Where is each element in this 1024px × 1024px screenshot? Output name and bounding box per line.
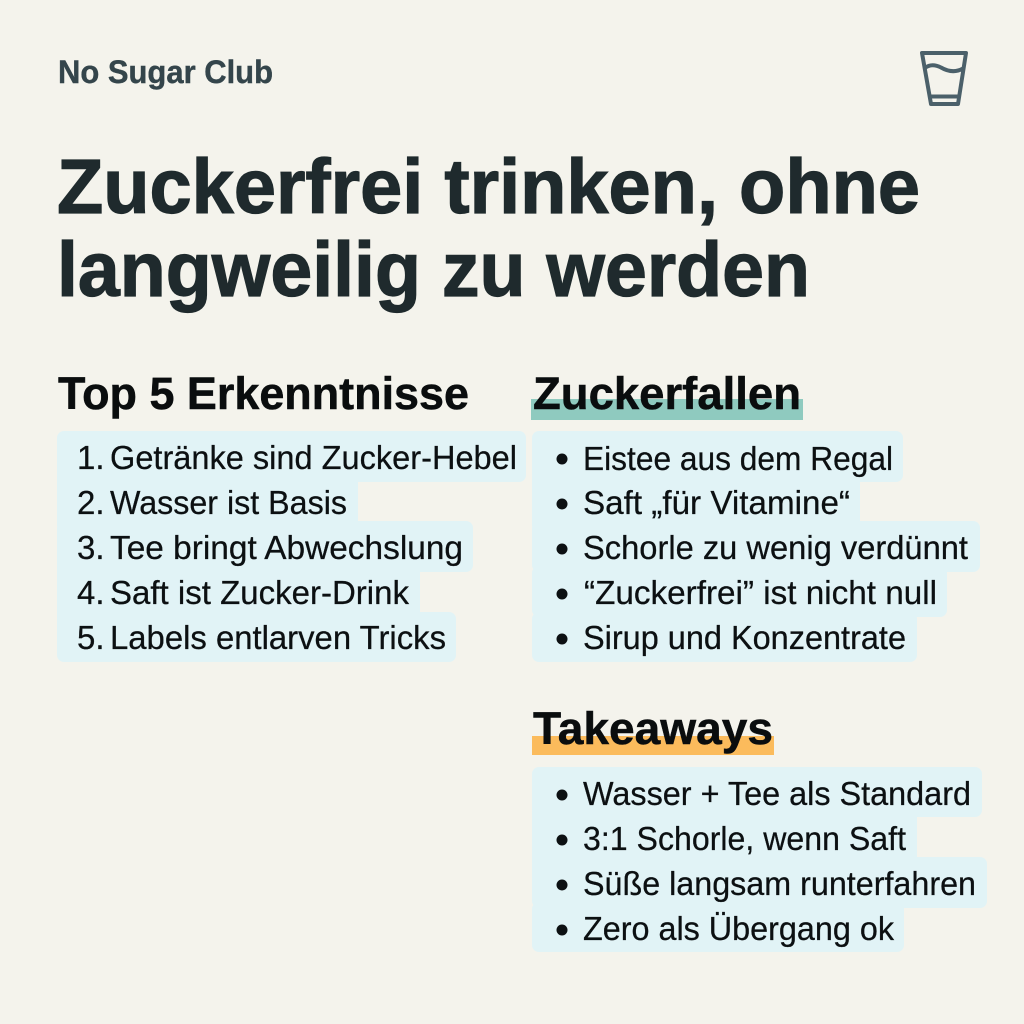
heading: Zuckerfallen: Zuckerfallen (533, 368, 801, 419)
brand name: No Sugar Club (58, 54, 273, 90)
bullet list (556, 775, 976, 947)
title (57, 144, 920, 313)
numbered list: 3. (77, 529, 105, 566)
numbered list: 1. (77, 439, 105, 476)
bullet list: Sirup und Konzentrate (583, 619, 906, 656)
bullet list (556, 440, 968, 656)
numbered list: 5. (77, 619, 105, 656)
heading: Takeaways: Takeaways (533, 703, 773, 754)
panel: Zuckerfallen (531, 368, 980, 662)
heading underline: orange (532, 736, 774, 755)
bullet list: Wasser + Tee als Standard (583, 775, 971, 812)
numbered list: Saft ist Zucker-Drink (110, 574, 409, 611)
bullet list: Eistee aus dem Regal (583, 440, 893, 477)
panel: Takeaways (532, 703, 987, 952)
title: Zuckerfrei trinken, ohne (57, 144, 920, 230)
panel: Top 5 Erkenntnisse (57, 368, 526, 662)
numbered list: Labels entlarven Tricks (110, 619, 446, 656)
numbered list: Wasser ist Basis (110, 484, 347, 521)
bullet list: Saft „für Vitamine“ (583, 484, 850, 521)
title: langweilig zu werden (57, 227, 810, 313)
bullet list: Schorle zu wenig verdünnt (583, 529, 968, 566)
bullet list: “Zuckerfrei” ist nicht null (584, 574, 937, 611)
list highlight background (532, 767, 987, 952)
numbered list (77, 439, 517, 656)
numbered list: Tee bringt Abwechslung (110, 529, 463, 566)
bullet list: Süße langsam runterfahren (583, 865, 976, 902)
heading: Top 5 Erkenntnisse: Top 5 Erkenntnisse (58, 368, 469, 419)
numbered list: Getränke sind Zucker-Hebel (110, 439, 517, 476)
list highlight background (532, 431, 980, 662)
list highlight background (57, 431, 526, 662)
bullet list: Zero als Übergang ok (583, 910, 894, 947)
icon: glass of water (922, 53, 966, 104)
numbered list: 4. (77, 574, 105, 611)
heading underline: teal (531, 399, 803, 420)
bullet list: 3:1 Schorle, wenn Saft (583, 820, 906, 857)
numbered list: 2. (77, 484, 105, 521)
